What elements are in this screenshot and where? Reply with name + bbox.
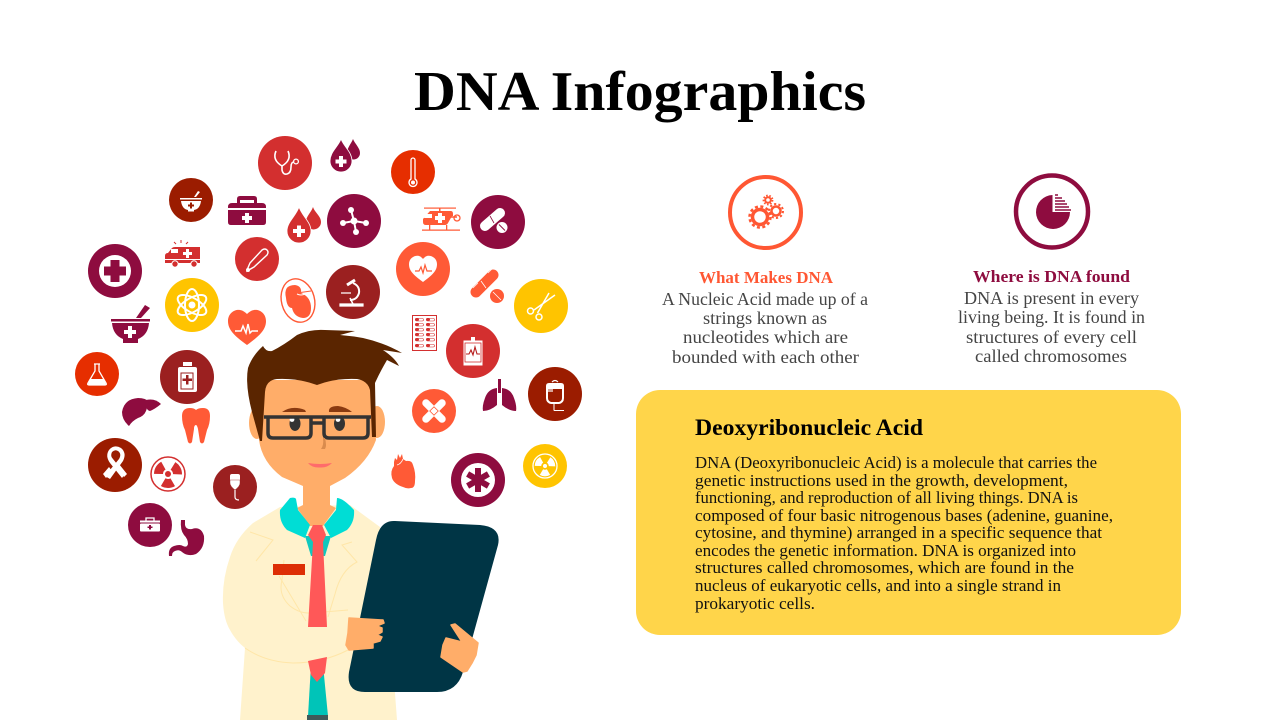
icon: iv bag circle bbox=[528, 367, 582, 421]
icon: bowl circle bbox=[169, 178, 213, 222]
panel body text: DNA (Deoxyribonucleic Acid) is a molecule that carries the bbox=[695, 453, 1097, 472]
icon: fetus bbox=[276, 275, 320, 326]
panel body text: prokaryotic cells. bbox=[695, 594, 815, 613]
icon: capsule bbox=[473, 269, 504, 303]
face bbox=[259, 380, 376, 486]
hand right bbox=[441, 624, 478, 672]
icon: drops maroon bbox=[330, 139, 360, 172]
neck bbox=[297, 478, 336, 526]
title: DNA Infographics bbox=[414, 61, 866, 123]
belt bbox=[307, 715, 328, 720]
icon: helicopter bbox=[422, 208, 460, 231]
panel body text: composed of four basic nitrogenous bases (adenine, guanine, bbox=[695, 506, 1113, 525]
icon: liver bbox=[122, 398, 161, 426]
text block: where is DNA found: DNA is present in every bbox=[964, 288, 1139, 308]
eye left bbox=[290, 416, 300, 431]
eyebrow right bbox=[329, 406, 352, 412]
icon: lungs bbox=[483, 379, 516, 411]
panel body text: functioning, and reproduction of all living things. DNA is bbox=[695, 488, 1078, 507]
tablet bbox=[349, 521, 499, 692]
icon: bottle circle bbox=[160, 350, 214, 404]
icon: stomach bbox=[169, 520, 204, 556]
icon: ribbon circle bbox=[88, 438, 142, 492]
panel body text: genetic instructions used in the growth, development, bbox=[695, 471, 1068, 490]
panel: deoxyribonucleic acid bbox=[636, 390, 1181, 635]
lower shirt bbox=[308, 665, 328, 716]
hair bbox=[247, 330, 402, 441]
icon: ambulance bbox=[165, 240, 200, 267]
text block: what makes DNA: strings known as bbox=[703, 308, 827, 328]
panel body text: encodes the genetic information. DNA is organized into bbox=[695, 541, 1076, 560]
icon: atom circle bbox=[165, 278, 219, 332]
mouth bbox=[308, 463, 332, 468]
icon: bandage circle bbox=[412, 389, 456, 433]
glasses bbox=[264, 417, 371, 438]
hand left bbox=[346, 618, 384, 650]
text block: where is DNA found: Where is DNA found bbox=[973, 267, 1131, 286]
icon: thermometer red circle bbox=[235, 237, 279, 281]
text block: what makes DNA: nucleotides which are bbox=[683, 327, 848, 347]
icon: blood drops bbox=[287, 207, 321, 243]
icon: microscope circle bbox=[326, 265, 380, 319]
panel body text: cytosine, and thymine) arranged in a specific sequence that bbox=[695, 523, 1102, 542]
doctor coat bbox=[223, 505, 397, 720]
nose bbox=[321, 438, 326, 449]
icon: radiation yellow bbox=[523, 444, 567, 488]
panel body text: structures called chromosomes, which are found in the bbox=[695, 558, 1074, 577]
ear right bbox=[369, 406, 385, 438]
shirt bbox=[305, 536, 331, 556]
text block: where is DNA found bbox=[958, 267, 1145, 366]
icon: anatomical heart bbox=[391, 454, 415, 488]
icon cloud: medical icons bbox=[75, 136, 582, 556]
eye right bbox=[334, 416, 345, 431]
collar right bbox=[324, 498, 354, 538]
panel body text bbox=[695, 453, 1113, 613]
text block: where is DNA found: living being. It is found in bbox=[958, 307, 1145, 327]
icon: first-aid kit bbox=[228, 196, 266, 225]
text block: what makes DNA bbox=[662, 268, 868, 367]
icon: mortar and pestle bbox=[111, 305, 150, 343]
icon: heart circle bbox=[396, 242, 450, 296]
icon: monitor circle bbox=[446, 324, 500, 378]
icon: pie chart ring bbox=[1016, 176, 1088, 248]
icon: kit circle bbox=[128, 503, 172, 547]
panel body text: nucleus of eukaryotic cells, and into a single strand in bbox=[695, 576, 1061, 595]
eyebrow left bbox=[282, 408, 306, 412]
icon: stethoscope bbox=[258, 136, 312, 190]
text block: where is DNA found: called chromosomes bbox=[975, 346, 1127, 366]
illustration: doctor with tablet bbox=[223, 330, 499, 720]
icon: plus ring bbox=[88, 244, 142, 298]
icon: flask circle bbox=[75, 352, 119, 396]
icon: tooth bbox=[182, 408, 210, 444]
text block: what makes DNA: A Nucleic Acid made up of a bbox=[662, 289, 868, 309]
icon: gears ring bbox=[730, 177, 801, 248]
icon: radiation red bbox=[151, 457, 185, 491]
text block: what makes DNA: What Makes DNA bbox=[699, 268, 834, 287]
tie bbox=[308, 525, 327, 627]
icon: pills circle bbox=[471, 195, 525, 249]
icon: heart pulse bbox=[228, 310, 266, 345]
text block: where is DNA found: structures of every cell bbox=[966, 327, 1137, 347]
icon: thermometer circle bbox=[391, 150, 435, 194]
icon: asterisk ring bbox=[451, 453, 505, 507]
icon: drip circle bbox=[213, 465, 257, 509]
text block: what makes DNA: bounded with each other bbox=[672, 347, 859, 367]
panel heading: Deoxyribonucleic Acid bbox=[695, 415, 923, 440]
tie tail bbox=[308, 657, 327, 682]
ear left bbox=[249, 407, 265, 439]
coat seams bbox=[245, 532, 357, 663]
icon: scissors circle bbox=[514, 279, 568, 333]
badge bbox=[273, 564, 305, 575]
icon: blister pack bbox=[412, 316, 436, 350]
icon: molecule circle bbox=[327, 194, 381, 248]
collar left bbox=[280, 498, 310, 538]
